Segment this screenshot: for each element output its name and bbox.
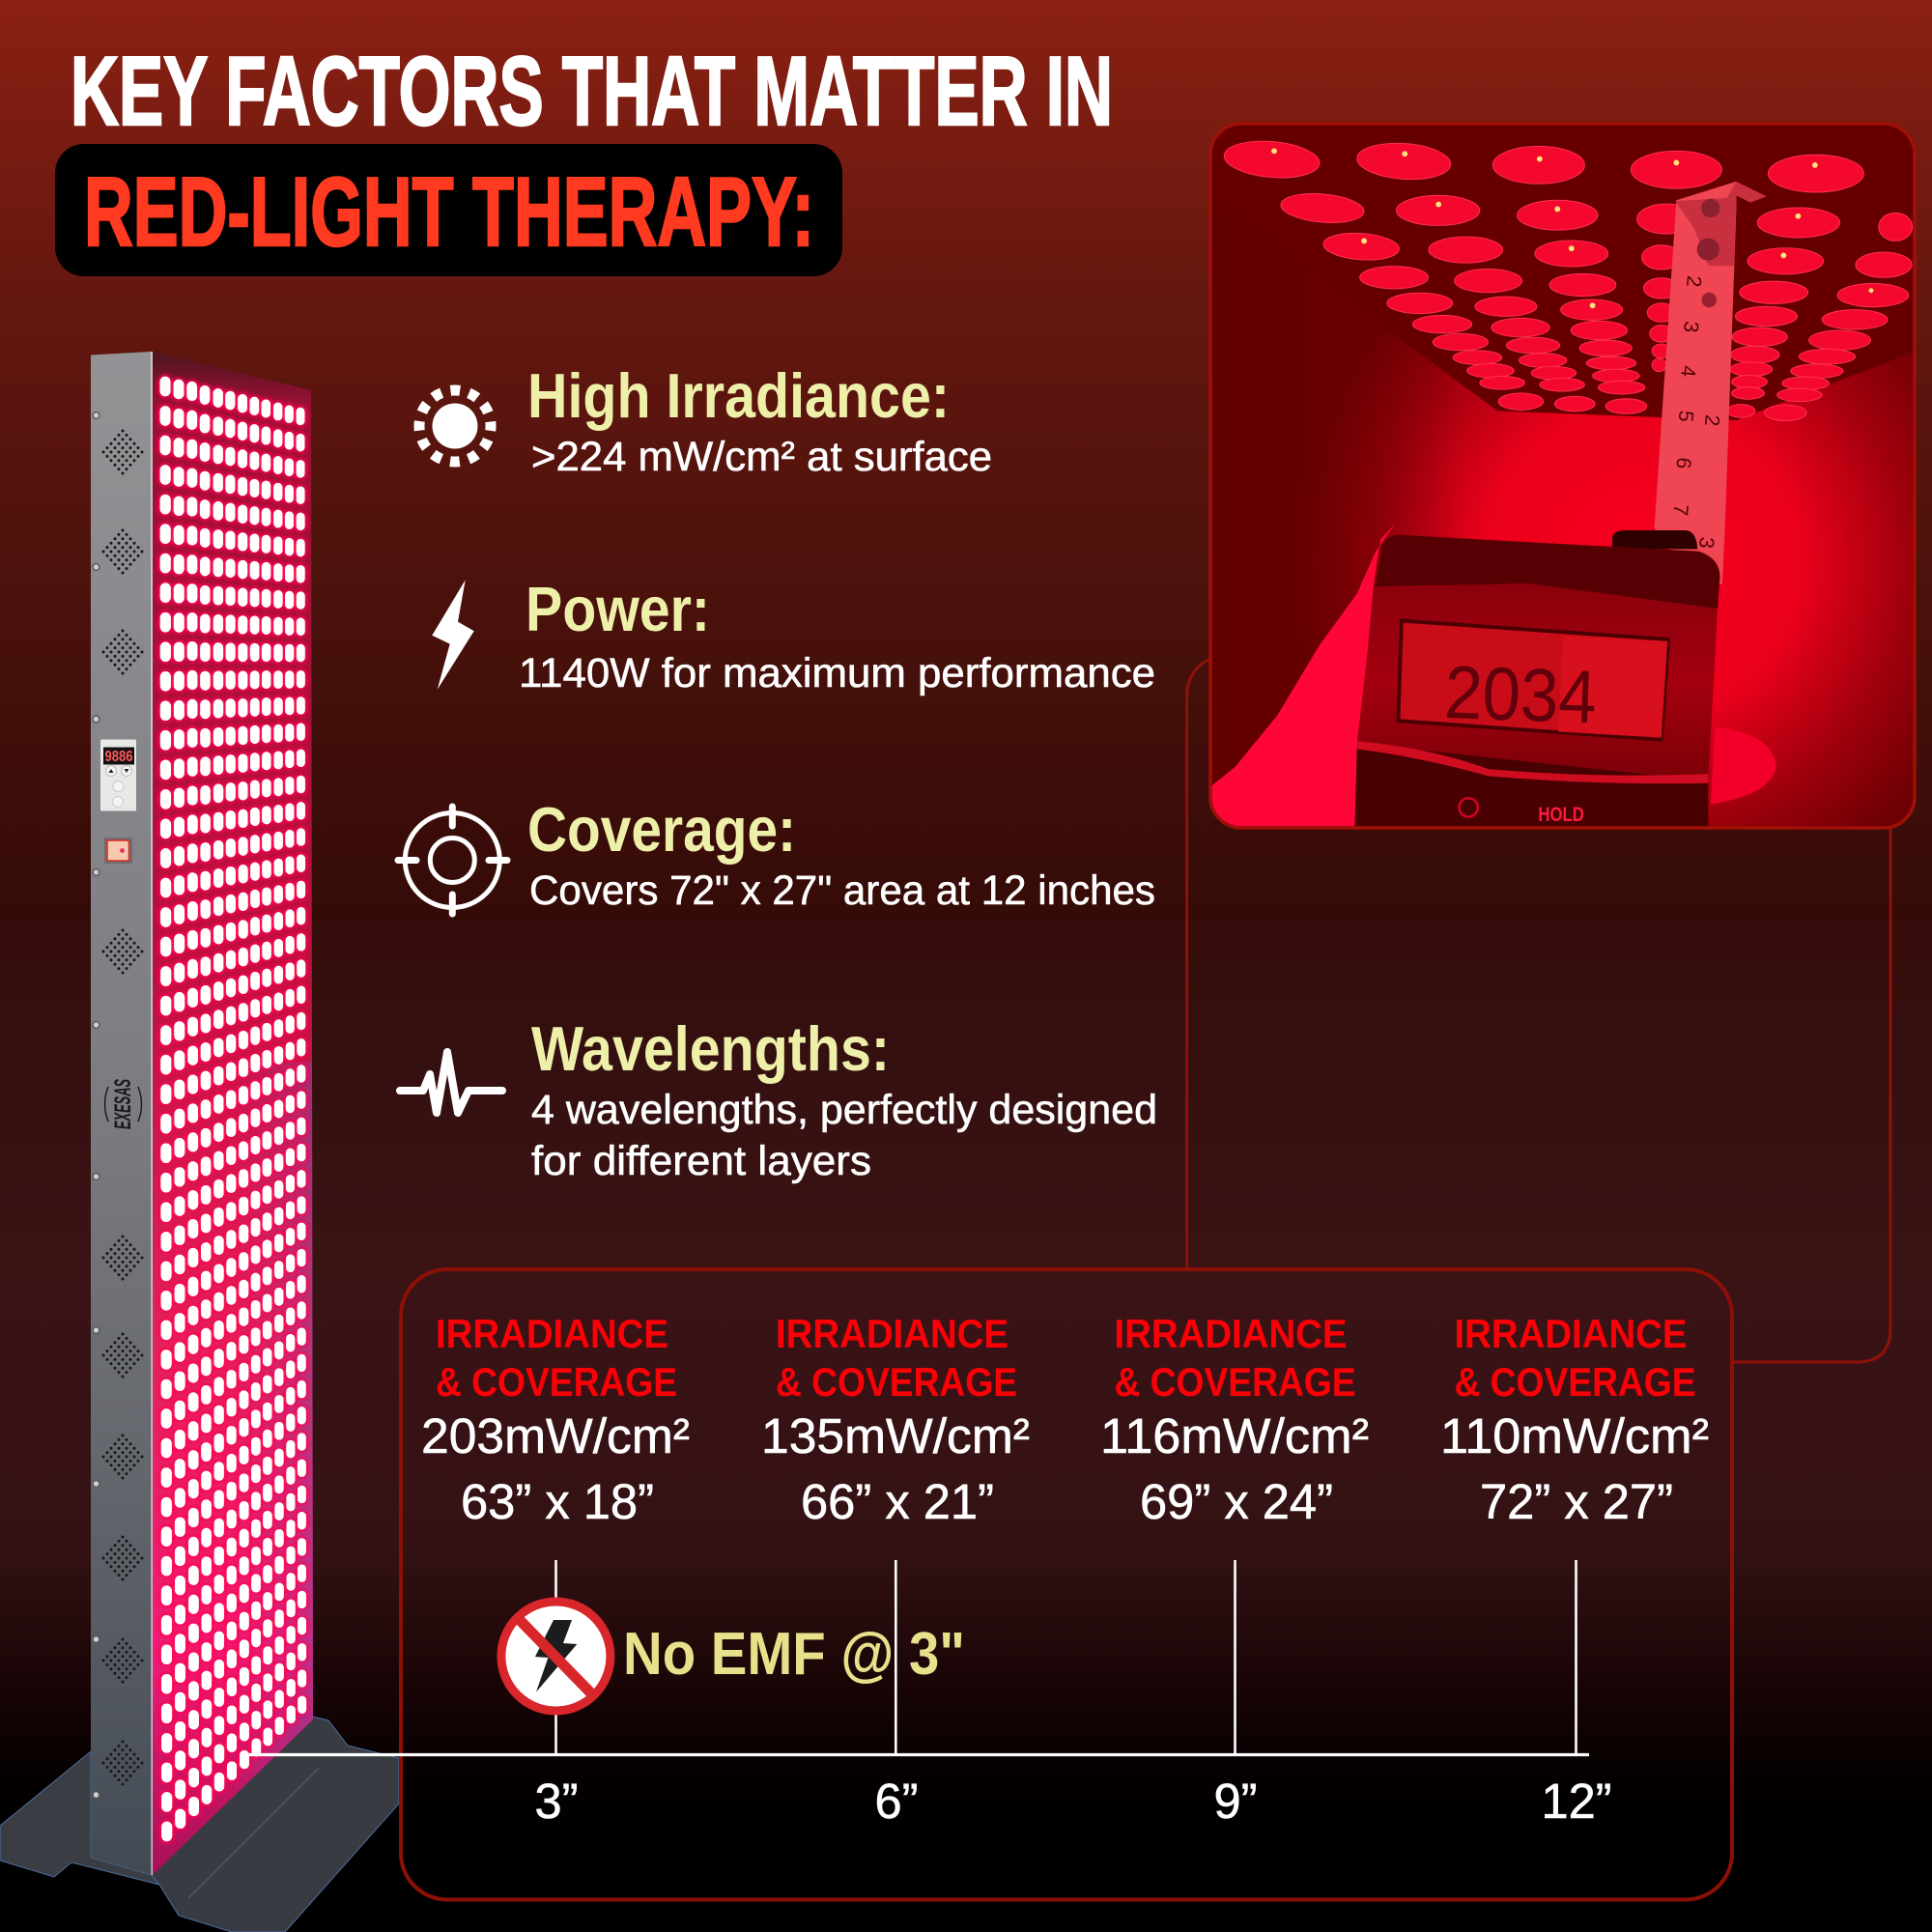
- connector frame linking photo and table: [1187, 659, 1890, 1362]
- title line 2 pill: [55, 144, 842, 276]
- photo background wall: [1341, 325, 1913, 826]
- column: 12 inches: 110mW/cm²: [1440, 1408, 1709, 1463]
- measuring tape: 3: [1694, 536, 1719, 550]
- side screws: [93, 412, 99, 1798]
- description line 2: for different layers: [531, 1138, 871, 1184]
- title line 1: KEY FACTORS THAT MATTER IN: [71, 38, 1113, 146]
- hand: [1212, 524, 1396, 828]
- control panel: [100, 740, 136, 811]
- control panel: 9886: [104, 749, 133, 765]
- description: >224 mW/cm² at surface: [531, 434, 992, 480]
- meter body: [1354, 530, 1719, 828]
- panel LEDs: [1223, 137, 1913, 421]
- distance axis: [249, 1560, 1589, 1754]
- LCD screen: 2034: [1443, 651, 1598, 739]
- column: 9 inches: [1100, 1311, 1369, 1529]
- description: Covers 72" x 27" area at 12 inches: [529, 867, 1155, 914]
- icon: no EMF sign: [501, 1602, 611, 1711]
- column: 6 inches: 66” x 21”: [801, 1474, 994, 1529]
- column: 6 inches: & COVERAGE: [776, 1359, 1017, 1405]
- description: 1140W for maximum performance: [519, 650, 1155, 696]
- column: 9 inches: IRRADIANCE: [1115, 1311, 1347, 1356]
- no EMF label: No EMF @ 3": [623, 1621, 965, 1688]
- column: 12 inches: IRRADIANCE: [1455, 1311, 1687, 1356]
- front face: [153, 352, 313, 1875]
- measuring tape: 5: [1674, 410, 1698, 423]
- column: 3 inches: & COVERAGE: [436, 1359, 677, 1405]
- column: 3 inches: 203mW/cm²: [421, 1408, 690, 1463]
- column: 3 inches: [421, 1311, 690, 1529]
- column: 12 inches: [1440, 1311, 1709, 1529]
- power switch: [104, 838, 132, 864]
- measuring tape: [1655, 182, 1767, 584]
- column: 6 inches: IRRADIANCE: [776, 1311, 1009, 1356]
- brand logo: EXESAS: [110, 1079, 136, 1129]
- measuring tape: 3: [1679, 320, 1703, 333]
- finger: [1711, 727, 1776, 805]
- LCD screen: [1398, 621, 1668, 740]
- icon: lightning bolt: [432, 580, 474, 690]
- heading: Power:: [526, 574, 710, 644]
- feature: coverage: [398, 794, 1155, 914]
- side face: [91, 352, 152, 1875]
- column: 12 inches: 72” x 27”: [1480, 1474, 1673, 1529]
- icon: pulse: [400, 1052, 502, 1113]
- hold label: HOLD: [1538, 803, 1584, 826]
- feature: high irradiance: [419, 360, 992, 480]
- icon: target: [398, 807, 507, 914]
- heading: High Irradiance:: [527, 360, 950, 431]
- front face purple edge: [232, 1063, 313, 1797]
- column: 3 inches: 63” x 18”: [461, 1474, 654, 1529]
- measuring tape: 7: [1668, 503, 1692, 517]
- description line 1: 4 wavelengths, perfectly designed: [531, 1087, 1157, 1133]
- feature: power: [432, 574, 1155, 696]
- column: 6 inches: [761, 1311, 1030, 1529]
- column: 12 inches: & COVERAGE: [1455, 1359, 1696, 1405]
- stand base: [0, 1717, 399, 1932]
- power symbol: [1459, 798, 1478, 817]
- measuring tape: 4: [1676, 364, 1700, 378]
- LED columns: [165, 382, 302, 1841]
- column: 3 inches: IRRADIANCE: [436, 1311, 668, 1356]
- axis labels: 12”: [1542, 1774, 1611, 1829]
- column: 9 inches: 116mW/cm²: [1100, 1408, 1369, 1463]
- column: 6 inches: 135mW/cm²: [761, 1408, 1030, 1463]
- column: 9 inches: 69” x 24”: [1140, 1474, 1333, 1529]
- measuring tape: 6: [1671, 456, 1695, 469]
- icon: sun: [419, 390, 491, 462]
- heading: Wavelengths:: [531, 1013, 890, 1084]
- column: 9 inches: & COVERAGE: [1115, 1359, 1356, 1405]
- title line 2 pill: RED-LIGHT THERAPY:: [84, 158, 814, 267]
- photo: irradiance meter under panel: [1210, 124, 1915, 828]
- feature: wavelengths: [400, 1013, 1157, 1184]
- panel: irradiance and coverage table: [249, 1269, 1732, 1899]
- measuring tape: 2: [1682, 274, 1706, 288]
- LED highlights: [1271, 148, 1873, 308]
- measuring tape: 2: [1700, 413, 1724, 427]
- axis labels: 6”: [875, 1774, 918, 1829]
- LED panel underside: [1389, 126, 1913, 420]
- brand logo: [104, 1079, 141, 1129]
- product: red light panel: [0, 352, 399, 1932]
- side speaker grilles: [103, 431, 142, 1784]
- side edge highlight: [151, 352, 153, 1875]
- table border: [401, 1269, 1732, 1899]
- heading: Coverage:: [527, 794, 796, 865]
- axis labels: 3”: [535, 1774, 578, 1829]
- axis labels: [535, 1774, 1611, 1829]
- axis labels: 9”: [1213, 1774, 1258, 1829]
